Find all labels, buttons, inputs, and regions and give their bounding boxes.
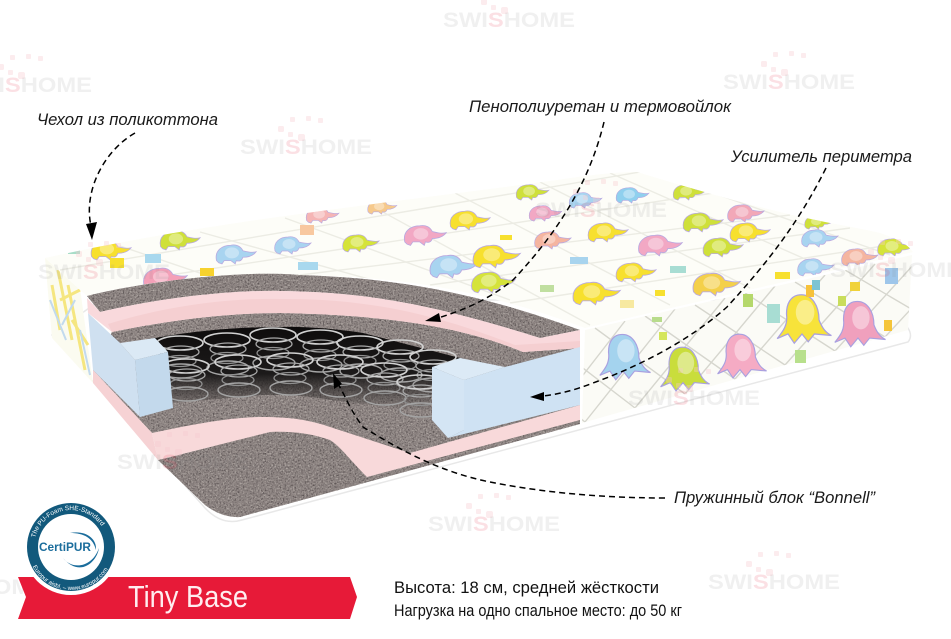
title ribbon — [18, 577, 357, 619]
CertiPUR badge: Europur aisbl. – www.europur.com — [32, 564, 108, 590]
base rim — [52, 300, 910, 522]
bottom felt layer — [158, 424, 580, 517]
felt backing under springs — [93, 313, 580, 477]
bottom pink foam layer — [93, 370, 580, 477]
arrow: spring block — [333, 373, 665, 498]
top cover surface — [45, 172, 914, 328]
right side cover — [582, 256, 912, 422]
arrow: foam and felt — [425, 122, 604, 322]
product specifications: Нагрузка на одно спальное место: до 50 кг — [394, 601, 682, 620]
arrow: cover — [86, 133, 135, 240]
watermark over mattress — [38, 179, 951, 474]
spring block — [155, 327, 460, 417]
product specifications — [394, 578, 682, 620]
left side cover — [45, 258, 93, 383]
label: perimeter reinforcement: Усилитель периметра — [730, 147, 912, 166]
label: foam and felt: Пенополиуретан и термовойлок — [469, 97, 732, 116]
title: Tiny Base — [128, 579, 248, 614]
label: spring block: Пружинный блок “Bonnell” — [674, 488, 876, 507]
top pink foam layer — [87, 291, 580, 352]
CertiPUR badge: The PU-Foam SHE-Standard — [30, 506, 106, 536]
CertiPUR badge — [27, 503, 115, 595]
label: cover: Чехол из поликоттона — [37, 110, 218, 129]
top felt layer — [87, 274, 580, 338]
arrow: perimeter — [530, 168, 826, 401]
product specifications: Высота: 18 см, средней жёсткости — [394, 578, 659, 597]
right blue foam block — [432, 347, 580, 438]
left blue foam block — [88, 313, 173, 417]
mattress illustration — [38, 172, 951, 522]
CertiPUR badge: CertiPUR — [39, 540, 91, 554]
